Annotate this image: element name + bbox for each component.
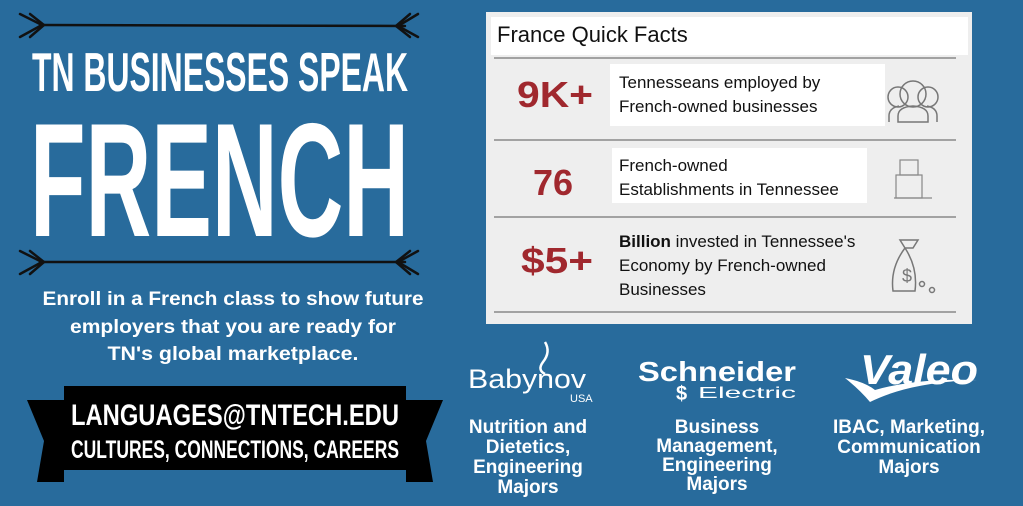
majors text: Majors: [878, 457, 940, 478]
call to action text: employers that you are ready for: [70, 317, 397, 338]
fact 2: Establishments in Tennessee: [619, 180, 839, 199]
majors text: Communication: [837, 437, 981, 458]
fact 2: French-owned: [619, 156, 728, 175]
fact 1: 9K+: [517, 74, 593, 115]
fact 1: [517, 64, 885, 126]
call to action text: [42, 289, 423, 365]
panel: France Quick Facts: [486, 12, 972, 324]
majors text: IBAC, Marketing,: [833, 417, 985, 438]
logo: Babynov: [468, 342, 593, 405]
majors text: Nutrition and: [469, 417, 587, 438]
arrow divider top: [20, 14, 418, 37]
logo: Schneider Electric: $: [676, 383, 687, 405]
fact 3: Businesses: [619, 280, 706, 299]
title line: TN BUSINESSES SPEAK: [32, 41, 408, 103]
majors text: Management,: [656, 436, 778, 457]
panel heading: France Quick Facts: [497, 22, 688, 47]
call to action text: TN's global marketplace.: [108, 344, 358, 365]
majors text: Engineering: [473, 457, 583, 478]
fact 1: French-owned businesses: [619, 97, 817, 116]
logo: Valeo: Valeo: [860, 346, 978, 393]
logo: Schneider Electric: Electric: [698, 385, 796, 402]
fact 3: Billion invested in Tennessee's: [619, 232, 855, 251]
icon: money bag: $: [902, 266, 912, 286]
fact 2: 76: [533, 162, 573, 203]
majors text: Majors: [686, 474, 748, 495]
logo: Babynov: USA: [570, 393, 593, 405]
icon: people: [888, 81, 938, 122]
fact 3: Economy by French-owned: [619, 256, 826, 275]
logo: Babynov: Babynov: [468, 364, 587, 394]
icon: building: [894, 160, 932, 198]
majors text: Majors: [497, 477, 559, 498]
majors text: [469, 417, 985, 498]
arrow divider bottom: [20, 251, 418, 274]
contact ribbon banner: CULTURES, CONNECTIONS, CAREERS: [71, 436, 399, 464]
logo: Schneider Electric: Schneider: [638, 356, 796, 387]
logo: Valeo: [845, 346, 978, 402]
title FRENCH: FRENCH: [30, 90, 409, 271]
fact 3: [521, 232, 855, 299]
majors text: Engineering: [662, 455, 772, 476]
contact ribbon banner: LANGUAGES@TNTECH.EDU: [71, 399, 399, 432]
majors text: Dietetics,: [486, 437, 570, 458]
call to action text: Enroll in a French class to show future: [42, 289, 423, 310]
icon: money bag: [892, 240, 934, 292]
fact 2: [533, 148, 867, 203]
contact ribbon banner: [27, 386, 443, 482]
fact 3: $5+: [521, 240, 593, 281]
fact 1: Tennesseans employed by: [619, 73, 821, 92]
majors text: Business: [675, 417, 759, 438]
logo: Schneider Electric: [638, 356, 796, 405]
